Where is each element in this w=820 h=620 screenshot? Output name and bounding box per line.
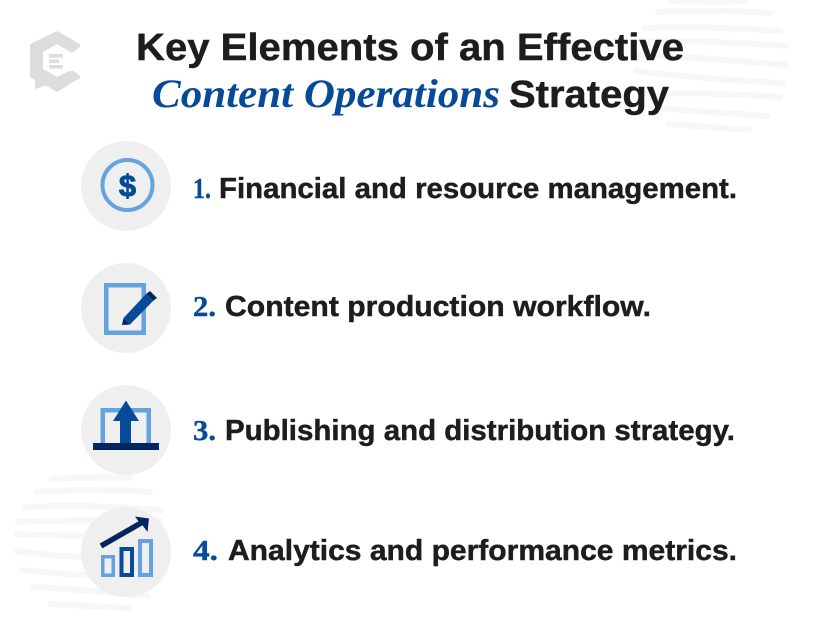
number 4: 4.	[193, 535, 218, 567]
icon: pencil on page	[81, 263, 171, 353]
label 2: Content production workflow.	[225, 291, 651, 323]
number 3: 3.	[193, 415, 216, 447]
label 3: Publishing and distribution strategy.	[225, 415, 735, 447]
title: Content Operations	[152, 71, 500, 116]
number 2: 2.	[193, 291, 216, 323]
number 1: 1.	[193, 173, 211, 205]
icon: dollar coin	[81, 141, 171, 231]
label 4: Analytics and performance metrics.	[228, 535, 737, 567]
logo	[30, 31, 80, 92]
item 4: analytics and performance metrics	[81, 507, 737, 597]
icon: upload arrow	[81, 385, 171, 475]
title: Strategy	[509, 74, 669, 116]
title: Key Elements of an Effective	[136, 27, 684, 69]
label 1: Financial and resource management.	[219, 173, 737, 205]
icon: dollar coin: $	[119, 168, 136, 203]
icon: bar chart with arrow	[81, 507, 171, 597]
title	[136, 27, 684, 116]
item 1: financial and resource management	[81, 141, 737, 231]
item 3: publishing and distribution strategy	[81, 385, 735, 475]
item 2: content production workflow	[81, 263, 651, 353]
